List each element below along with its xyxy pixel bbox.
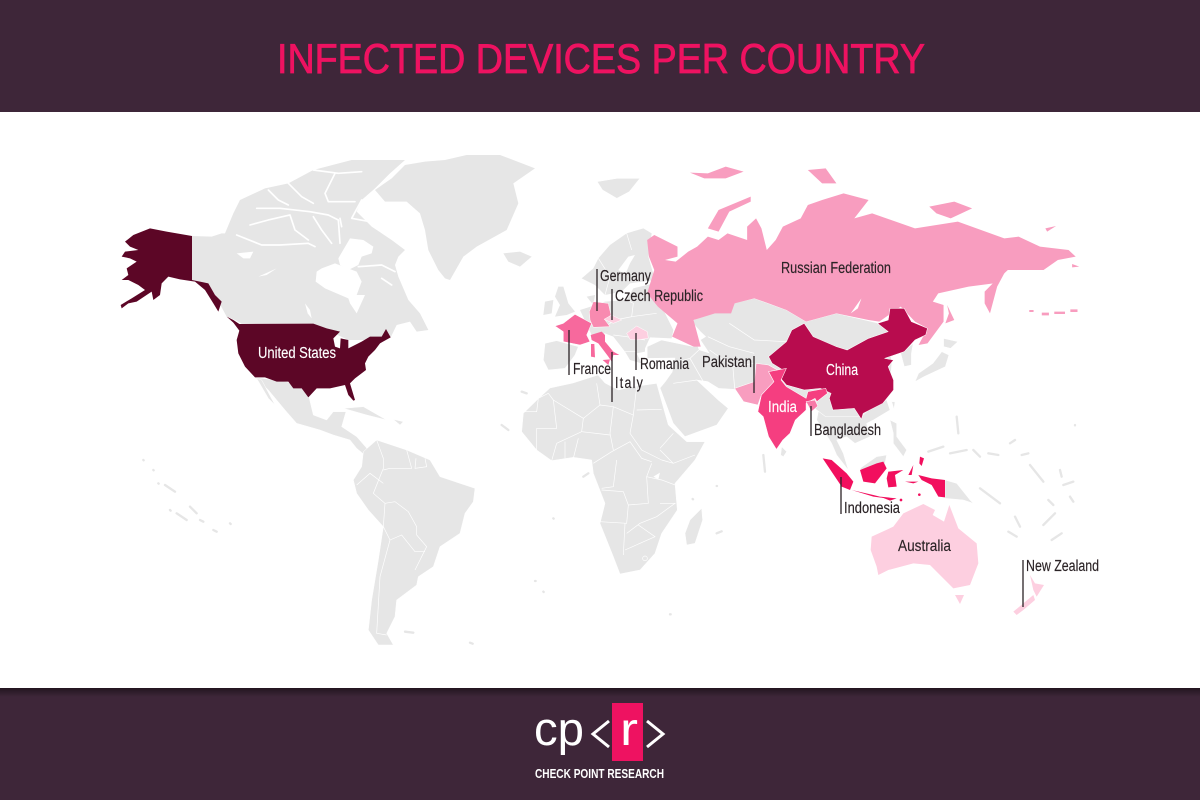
Greenland and Iceland xyxy=(375,155,535,280)
callout: France: France xyxy=(573,361,611,378)
callout: New Zealand: New Zealand xyxy=(1026,558,1099,575)
callout: Germany xyxy=(597,268,651,311)
France xyxy=(555,314,592,345)
India xyxy=(758,368,827,449)
Southeast Asia gray land xyxy=(763,400,1075,540)
Asia gray land xyxy=(647,298,892,437)
Mexico and Central America xyxy=(255,377,403,457)
callout: France xyxy=(569,330,611,378)
Germany xyxy=(589,302,611,327)
callout: Indonesia xyxy=(841,477,900,517)
callout: Czech Republic xyxy=(612,288,703,320)
header band xyxy=(0,0,1200,112)
title: INFECTED DEVICES PER COUNTRY xyxy=(277,35,925,82)
North America land xyxy=(121,155,535,457)
label: India: India xyxy=(768,399,797,416)
callout: Bangladesh xyxy=(811,406,881,439)
callout: Romania: Romania xyxy=(640,356,689,373)
label: Russian Federation: Russian Federation xyxy=(781,260,891,277)
New Zealand xyxy=(1013,575,1044,615)
logo: Check Point Research: r xyxy=(620,703,638,755)
Russian Federation xyxy=(647,167,1079,347)
Oceania xyxy=(823,457,1044,615)
Atlantic islands xyxy=(405,392,722,644)
callout: Pakistan xyxy=(702,354,754,393)
callout: Czech Republic: Czech Republic xyxy=(615,288,703,305)
label: China: China xyxy=(826,362,858,379)
South America and Africa land xyxy=(353,375,722,645)
China xyxy=(769,308,927,419)
Eurasia land and countries xyxy=(597,167,1079,449)
callout: Pakistan: Pakistan xyxy=(702,354,752,371)
callout: New Zealand xyxy=(1023,558,1099,607)
callout: Italy xyxy=(612,352,644,402)
Madagascar xyxy=(685,508,703,545)
footer band xyxy=(0,688,1200,800)
Svalbard, Japan and Korea xyxy=(597,178,958,382)
South America xyxy=(353,440,475,645)
panel: map background xyxy=(0,112,1200,688)
Pacific islands xyxy=(143,460,231,532)
logo: Check Point Research: cp xyxy=(534,702,584,755)
footer shadow xyxy=(0,688,1200,697)
Italy xyxy=(591,332,619,365)
callout: Italy: Italy xyxy=(615,374,644,391)
United States xyxy=(227,317,391,401)
Czech Republic xyxy=(604,315,622,323)
callout: Romania xyxy=(636,333,689,373)
Africa xyxy=(522,375,705,574)
callout: Indonesia: Indonesia xyxy=(844,500,900,517)
Indonesia xyxy=(823,457,945,501)
callout: Germany: Germany xyxy=(600,268,651,285)
callout: Bangladesh: Bangladesh xyxy=(814,422,881,439)
label: United States: United States xyxy=(258,345,336,362)
Alaska xyxy=(121,228,222,312)
European countries xyxy=(555,302,648,365)
label: Australia: Australia xyxy=(898,538,951,555)
Canada xyxy=(192,160,428,340)
Australia xyxy=(871,504,978,604)
Bangladesh xyxy=(806,400,818,412)
logo: Check Point Research xyxy=(534,702,664,781)
Europe gray land xyxy=(543,228,673,370)
world map xyxy=(121,155,1079,645)
Romania xyxy=(627,326,648,340)
logo: Check Point Research: CHECK POINT RESEARCH xyxy=(535,767,664,781)
Pakistan xyxy=(735,363,777,405)
